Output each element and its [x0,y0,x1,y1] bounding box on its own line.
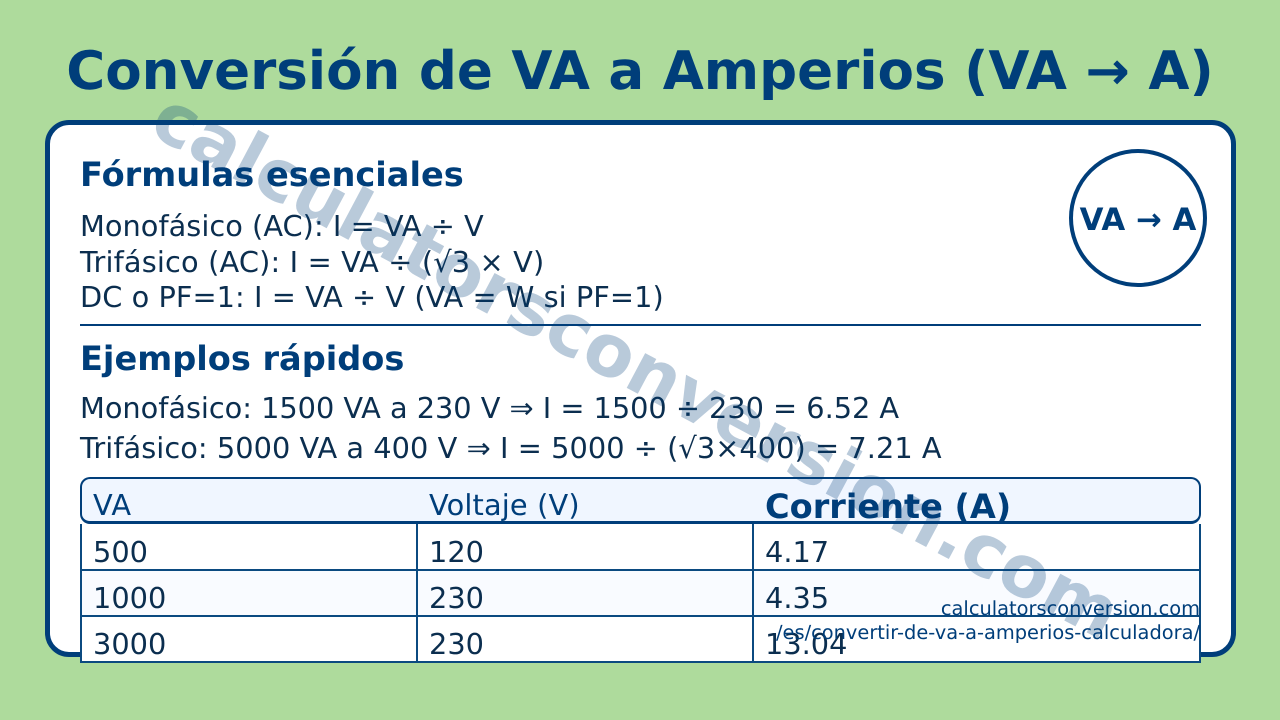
text block: formulas: DC o PF=1: I = VA ÷ V (VA = W si PF=1) [80,280,664,314]
heading: ejemplos rápidos: Ejemplos rápidos [80,339,404,378]
heading: fórmulas esenciales: Fórmulas esenciales [80,155,464,194]
table [80,477,1201,663]
source url: calculatorsconversion.com [941,597,1200,620]
text block: formulas [80,209,664,314]
table header row [80,477,1201,524]
source url [776,597,1200,644]
table row: 1000: 230 [429,581,484,615]
watermark: calculatorsconversion.com [139,73,1134,656]
table row: 500: 4.17 [765,535,829,569]
table row: 500: 500 [93,535,148,569]
source url: /es/convertir-de-va-a-amperios-calculadora/ [776,621,1200,644]
table row: 3000 [80,617,1201,663]
table row: 500 [80,524,1201,571]
table row: 3000: 3000 [93,627,166,661]
text block: examples: Monofásico: 1500 VA a 230 V ⇒ I = 1500 ÷ 230 = 6.52 A [80,391,899,425]
table row: 1000: 1000 [93,581,166,615]
panel: main card [45,120,1236,657]
table row: 3000: 230 [429,627,484,661]
header: VA: VA [93,488,132,522]
title: Conversión de VA a Amperios (VA → A) [66,40,1214,102]
text block: examples: Trifásico: 5000 VA a 400 V ⇒ I = 5000 ÷ (√3×400) = 7.21 A [80,431,942,465]
header: voltaje: Voltaje (V) [429,488,580,522]
text block: formulas: Trifásico (AC): I = VA ÷ (√3 × V) [80,244,544,278]
header: corriente: Corriente (A) [765,487,1011,526]
icon: VA to A badge: VA → A [1080,202,1196,238]
table row: 500: 120 [429,535,484,569]
table row: 3000: 13.04 [765,627,847,661]
table row: 1000: 4.35 [765,581,829,615]
text block: formulas: Monofásico (AC): I = VA ÷ V [80,209,484,243]
icon: VA to A badge [1069,149,1207,287]
divider [80,324,1201,326]
text block: examples [80,391,942,465]
table row: 1000 [80,571,1201,617]
